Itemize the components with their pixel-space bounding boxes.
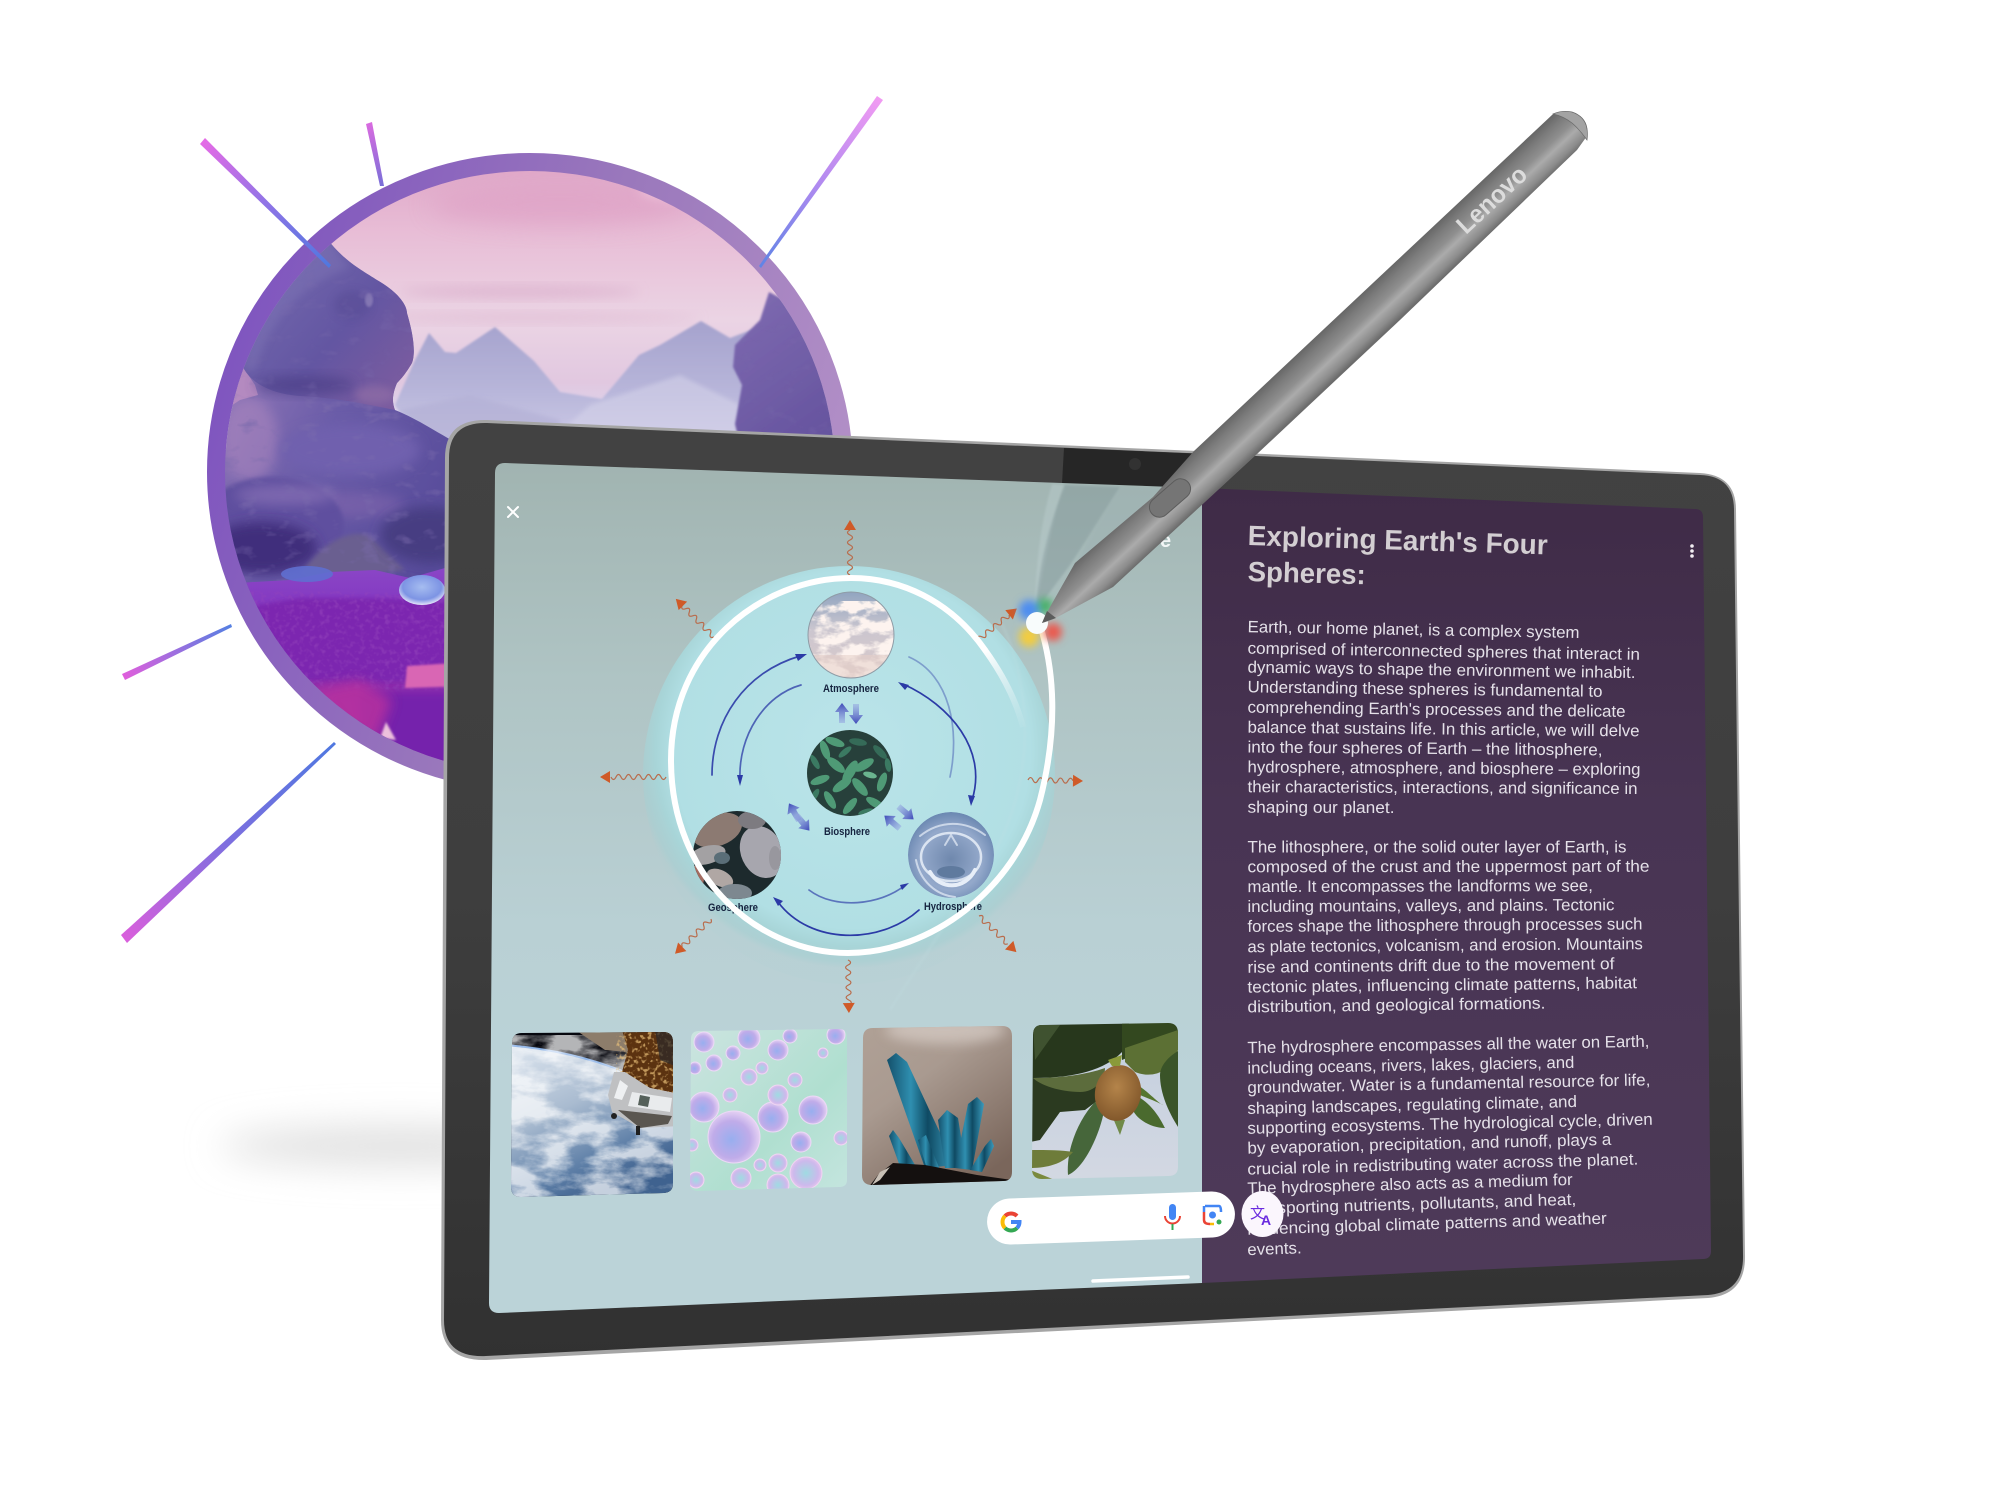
circle frame ring <box>216 162 844 782</box>
exchange arrows <box>783 703 918 835</box>
pen shadow on screen <box>1035 484 1160 615</box>
ray top <box>366 122 384 186</box>
paragraph one: comprehending Earth's processes and the delicate <box>1247 699 1626 721</box>
hidden header letter: e <box>1160 530 1171 552</box>
lower left leaves <box>1030 1150 1073 1168</box>
wavy arrow top <box>844 520 856 575</box>
paragraph one: hydrosphere, atmosphere, and biosphere – exploring <box>1247 758 1641 779</box>
paragraph one: Earth, our home planet, is a complex system <box>1247 618 1580 642</box>
paragraph two: rise and continents drift due to the movement of <box>1247 955 1615 977</box>
hanging leaves <box>1068 1102 1105 1175</box>
upper boulder <box>243 240 414 410</box>
paragraph three <box>1247 1033 1653 1259</box>
rounded foreground boulder <box>226 476 342 534</box>
paragraph one: comprised of interconnected spheres that interact in <box>1247 640 1640 664</box>
scenery circle illustration <box>200 150 860 800</box>
article title <box>1247 520 1548 590</box>
pen end cap <box>1553 111 1587 140</box>
glass orbs <box>399 575 445 605</box>
lenovo wordmark: Lenovo <box>1451 160 1533 240</box>
geosphere image <box>693 811 781 899</box>
sky <box>226 171 832 450</box>
paragraph three: The hydrosphere encompasses all the water on Earth, <box>1247 1033 1650 1057</box>
paragraph two: forces shape the lithosphere through processes such <box>1247 915 1643 936</box>
pen contact ring <box>1026 612 1048 634</box>
cycle arrows <box>712 656 976 935</box>
paragraph three: supporting ecosystems. The hydrological cycle, driven <box>1247 1111 1653 1138</box>
decorative rays around circle <box>121 96 883 943</box>
tablet <box>441 420 1745 1360</box>
home indicator <box>1093 1277 1188 1281</box>
article title: Exploring Earth's Four <box>1247 520 1548 560</box>
google colour glow <box>1019 598 1062 647</box>
tablet cast shadow <box>220 1126 580 1166</box>
menu dots <box>1690 544 1694 558</box>
camera lens <box>1129 458 1141 470</box>
label atmosphere: Atmosphere <box>823 683 879 695</box>
paragraph three: by evaporation, precipitation, and runoff, plays a <box>1247 1131 1612 1158</box>
translate button: 文 <box>1250 1205 1265 1222</box>
reading panel text <box>1247 520 1653 1259</box>
paragraph two: tectonic plates, influencing climate patterns, habitat <box>1247 974 1638 997</box>
radiating wavy arrows <box>600 520 1083 1013</box>
ray lower left small <box>122 624 232 680</box>
reading panel background <box>1202 488 1711 1283</box>
left dark foliage <box>1032 1078 1096 1142</box>
google logo <box>1003 1214 1020 1230</box>
landscape inside circle <box>200 150 860 800</box>
pen button <box>1145 475 1195 521</box>
wavy arrow right <box>1028 774 1083 787</box>
wavy arrow upper right <box>974 604 1021 645</box>
paragraph three: influencing global climate patterns and weather <box>1247 1210 1608 1239</box>
left rock mass <box>225 244 449 582</box>
pen tip <box>1042 611 1056 623</box>
thumbnail: bubbles <box>686 1026 850 1196</box>
infographic canvas <box>121 96 1745 1360</box>
paragraph one: balance that sustains life. In this article, we will delve <box>1247 719 1640 740</box>
white pen-drawn circle stroke <box>671 578 1052 953</box>
paragraph two: including mountains, valleys, and plains. Tectonic <box>1247 896 1615 916</box>
bubble backdrop <box>643 566 1055 984</box>
thumbnail: earth from space <box>511 1032 673 1197</box>
earth spheres diagram <box>600 520 1083 1013</box>
paragraph three: The hydrosphere also acts as a medium for <box>1247 1171 1573 1198</box>
wavy arrow lower right <box>975 912 1021 956</box>
lens icon <box>1204 1206 1222 1224</box>
atmosphere image <box>808 592 894 678</box>
pink crag <box>233 368 258 404</box>
paragraph one <box>1247 618 1641 817</box>
fruit <box>1094 1065 1142 1121</box>
upper right leaves <box>1122 1023 1178 1060</box>
sphere labels <box>708 683 982 914</box>
arrow heads <box>737 654 975 906</box>
paragraph one: Understanding these spheres is fundamental to <box>1247 678 1603 701</box>
grey ledge <box>306 534 402 572</box>
stylus pen <box>1042 111 1587 623</box>
biosphere image <box>805 728 895 818</box>
wavy arrow lower left <box>671 915 715 958</box>
ray upper left <box>200 138 331 268</box>
paragraph three: including oceans, rivers, lakes, glaciers, and <box>1247 1054 1575 1078</box>
right rock <box>732 291 833 436</box>
thumbnail: fruit and leaves <box>1030 1020 1180 1182</box>
pen body <box>1042 111 1587 623</box>
paragraph three: shaping landscapes, regulating climate, and <box>1247 1093 1577 1118</box>
mountains <box>394 320 751 430</box>
ray lower left long <box>121 742 336 943</box>
search pill <box>986 1191 1236 1245</box>
paragraph one: shaping our planet. <box>1247 799 1395 817</box>
ray upper right <box>759 96 883 268</box>
lower rock shading <box>222 398 278 482</box>
paragraph one: their characteristics, interactions, and significance in <box>1247 778 1638 798</box>
purple field <box>246 568 444 760</box>
paragraph three: groundwater. Water is a fundamental resource for life, <box>1247 1071 1651 1097</box>
wavy arrow upper left <box>672 595 718 641</box>
paragraph two: distribution, and geological formations. <box>1247 995 1546 1016</box>
translate button <box>1242 1191 1284 1237</box>
translate button: A <box>1261 1212 1271 1228</box>
mic icon <box>1165 1204 1180 1230</box>
paragraph two: mantle. It encompasses the landforms we see, <box>1247 877 1593 896</box>
tablet bezel <box>444 423 1743 1356</box>
close icon <box>508 507 518 517</box>
label geosphere: Geosphere <box>708 902 758 914</box>
paragraph three: crucial role in redistributing water across the planet. <box>1247 1151 1638 1179</box>
label hydrosphere: Hydrosphere <box>924 901 982 913</box>
tablet side rim <box>441 420 1745 1360</box>
paragraph one: dynamic ways to shape the environment we inhabit. <box>1247 659 1636 682</box>
label biosphere: Biosphere <box>824 826 870 838</box>
screen left pane <box>489 463 1202 1313</box>
paragraph two: The lithosphere, or the solid outer layer of Earth, is <box>1248 838 1626 856</box>
wavy arrow left <box>600 771 666 783</box>
thumbnail: crystals <box>862 1026 1012 1185</box>
paragraph two: as plate tectonics, volcanism, and erosion. Mountains <box>1247 935 1643 956</box>
big dark leaf <box>1030 1020 1130 1078</box>
hydrosphere image <box>908 812 994 898</box>
wavy arrow bottom <box>842 960 855 1013</box>
paragraph two <box>1247 838 1650 1016</box>
paragraph three: transporting nutrients, pollutants, and heat, <box>1247 1191 1576 1218</box>
paragraph one: into the four spheres of Earth – the lithosphere, <box>1247 739 1603 759</box>
article title: Spheres: <box>1247 556 1366 590</box>
paragraph three: events. <box>1247 1239 1302 1259</box>
paragraph two: composed of the crust and the uppermost part of the <box>1247 858 1650 876</box>
